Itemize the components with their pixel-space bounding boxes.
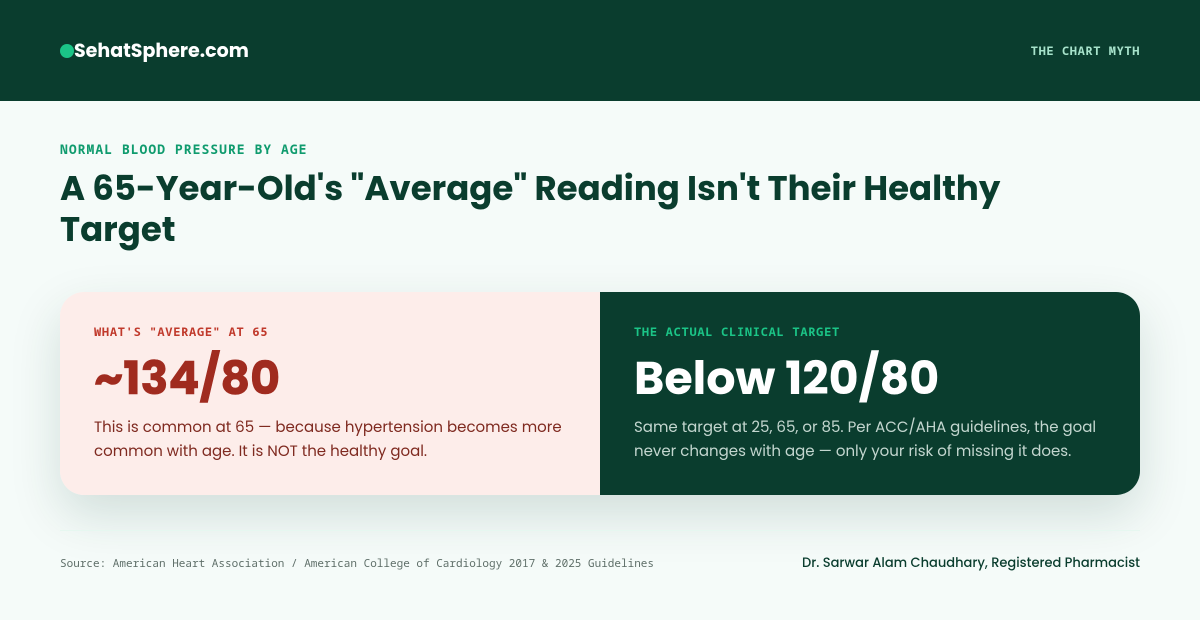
target value: Below 120/80: [634, 347, 939, 411]
header tag: THE CHART MYTH: [1031, 42, 1140, 59]
panel label: THE ACTUAL CLINICAL TARGET: [634, 323, 840, 340]
author credit: Dr. Sarwar Alam Chaudhary, Registered Pharmacist: [802, 553, 1140, 572]
comparison card: [60, 292, 1140, 495]
average value: ~134/80: [94, 347, 280, 411]
header band: [0, 0, 1200, 101]
footer divider: [60, 530, 1140, 531]
title: A 65-Year-Old's "Average" Reading Isn't Their Healthy Target: [60, 164, 1000, 253]
eyebrow: NORMAL BLOOD PRESSURE BY AGE: [60, 140, 308, 158]
panel: average at 65: [60, 292, 600, 495]
target description: Same target at 25, 65, or 85. Per ACC/AHA guidelines, the goal never changes with age — only your risk of missing it does.: [634, 417, 1096, 462]
average description: This is common at 65 — because hypertension becomes more common with age. It is NOT the healthy goal.: [94, 417, 562, 462]
source note: Source: American Heart Association / American College of Cardiology 2017 & 2025 Guidelines: [60, 556, 654, 571]
logo text: SehatSphere.com: [74, 37, 249, 64]
logo dot: [60, 44, 74, 58]
panel label: WHAT'S "AVERAGE" AT 65: [94, 323, 268, 340]
panel: clinical target: [600, 292, 1140, 495]
